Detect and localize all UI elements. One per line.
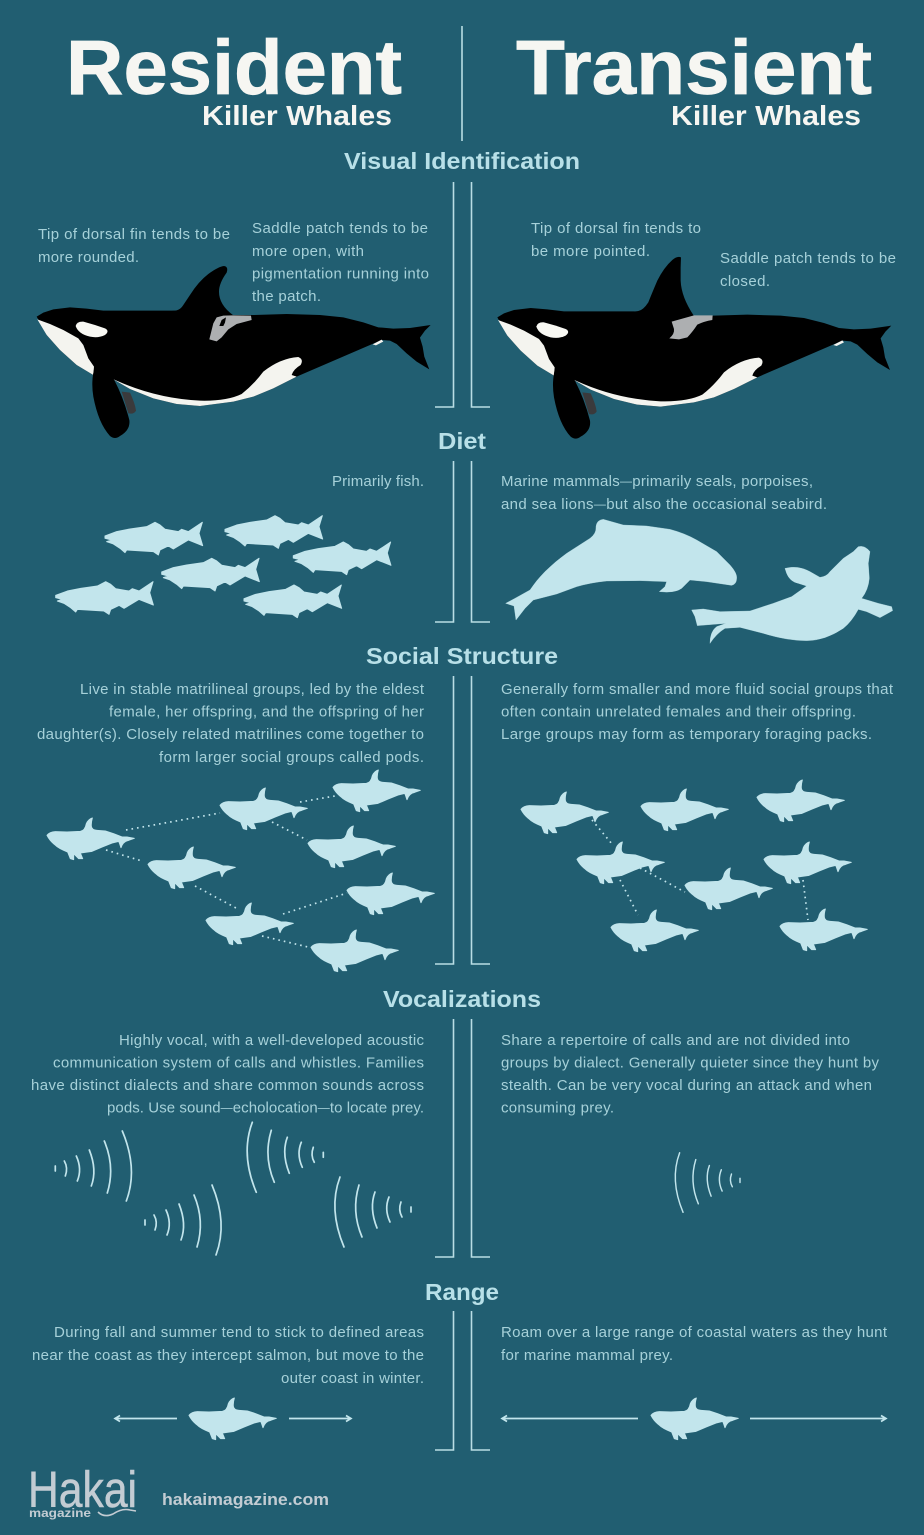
text: transient saddle patch: Saddle patch tends to be — [720, 250, 896, 267]
saddle patch closed — [669, 315, 713, 339]
diagram: transient range — [502, 1398, 886, 1440]
footer: Hakai logo: Hakai — [28, 1461, 137, 1518]
title: Transient: Transient — [516, 25, 872, 111]
footer: website: hakaimagazine.com — [162, 1491, 329, 1509]
subtitle: Killer Whales right: Killer Whales — [671, 100, 861, 131]
text: transient range: for marine mammal prey. — [501, 1347, 673, 1364]
text: transient diet: — — [620, 474, 632, 488]
header divider — [461, 26, 463, 141]
title: Resident: Resident — [66, 25, 402, 111]
text: resident dorsal fin — [38, 226, 230, 266]
arrow: short right — [289, 1416, 351, 1422]
icon: porpoise — [506, 519, 737, 620]
text: transient vocalizations: Share a repertoire of calls and are not divided into — [501, 1032, 850, 1049]
text: transient range: Roam over a large range of coastal waters as they hunt — [501, 1324, 888, 1341]
text: resident range — [32, 1324, 424, 1387]
icon: transient sound wave — [675, 1153, 740, 1212]
text: resident social structure: Live in stable matrilineal groups, led by the eldest — [80, 681, 425, 698]
icon: seal — [692, 546, 893, 643]
text: resident range: near the coast as they intercept salmon, but move to the — [32, 1347, 424, 1364]
heading: Social Structure: Social Structure — [366, 643, 558, 669]
chart: transient group network — [521, 780, 867, 952]
bracket divider — [435, 461, 490, 622]
bracket divider — [435, 182, 490, 407]
text: resident social structure: form larger social groups called pods. — [159, 749, 424, 766]
text: resident vocalizations: pods. Use sound — [107, 1100, 221, 1116]
text: resident dorsal fin: Tip of dorsal fin tends to be — [38, 226, 230, 243]
text: transient diet: — — [594, 497, 606, 511]
text: transient dorsal fin: Tip of dorsal fin tends to — [531, 220, 701, 237]
text: resident vocalizations: Highly vocal, with a well-developed acoustic — [119, 1032, 424, 1049]
section: social structure — [37, 643, 894, 972]
text: transient vocalizations — [501, 1032, 880, 1116]
section: visual identification — [37, 148, 896, 439]
text: resident vocalizations: — — [221, 1101, 233, 1115]
text: transient vocalizations: groups by dialect. Generally quieter since they hunt by — [501, 1054, 880, 1072]
section: vocalizations — [31, 986, 880, 1257]
illustration: resident orca — [37, 266, 431, 438]
subtitle: Killer Whales: Killer Whales — [202, 100, 392, 131]
heading: Range: Range — [425, 1279, 499, 1305]
text: transient saddle patch — [720, 250, 896, 290]
section: range — [32, 1279, 888, 1450]
text: transient saddle patch: closed. — [720, 273, 770, 290]
text: resident range: outer coast in winter. — [281, 1370, 424, 1387]
bracket divider — [435, 1019, 490, 1257]
text: transient vocalizations: stealth. Can be very vocal during an attack and when — [501, 1077, 872, 1094]
text: resident vocalizations: echolocation — [233, 1100, 318, 1116]
section: diet — [56, 428, 893, 643]
text: resident vocalizations: to locate prey. — [330, 1100, 424, 1116]
arrow: long left — [502, 1416, 638, 1422]
text: resident saddle patch: the patch. — [252, 288, 321, 305]
text: resident vocalizations: — — [318, 1101, 330, 1115]
text: transient diet: primarily seals, porpoises, — [632, 473, 813, 490]
text: resident saddle patch: pigmentation running into — [252, 266, 429, 282]
bracket divider — [435, 676, 490, 964]
text: resident saddle patch — [252, 220, 429, 305]
text: resident saddle patch: Saddle patch tends to be — [252, 220, 428, 237]
heading: Visual Identification: Visual Identification — [344, 148, 580, 174]
header: transient — [516, 25, 872, 131]
text: resident diet: Primarily fish. — [332, 473, 424, 490]
text: transient social structure: often contain unrelated females and their offspring. — [501, 704, 856, 720]
text: resident vocalizations: communication system of calls and whistles. Families — [53, 1054, 424, 1072]
text: transient diet: and sea lions — [501, 496, 594, 513]
heading: Vocalizations: Vocalizations — [383, 986, 541, 1012]
icon: orca resident range — [189, 1398, 276, 1440]
text: resident social structure — [37, 681, 425, 766]
arrow: short left — [115, 1416, 177, 1422]
text: resident vocalizations: have distinct dialects and share common sounds across — [31, 1077, 424, 1094]
illustration: transient orca — [497, 257, 891, 439]
text: resident saddle patch: more open, with — [252, 243, 364, 260]
text: transient social structure — [501, 681, 894, 743]
footer: Hakai logo: magazine — [29, 1506, 91, 1520]
text: transient dorsal fin — [531, 220, 701, 260]
pointed dorsal fin — [634, 257, 694, 316]
diagram: resident range — [115, 1398, 351, 1440]
header: resident — [66, 25, 402, 131]
chart: resident pod network — [47, 770, 434, 972]
text: resident range: During fall and summer tend to stick to defined areas — [54, 1324, 424, 1341]
text: resident dorsal fin: more rounded. — [38, 249, 139, 266]
text: transient diet: Marine mammals — [501, 473, 620, 490]
saddle patch open — [209, 315, 252, 341]
text: transient vocalizations: consuming prey. — [501, 1100, 614, 1116]
text: resident social structure: female, her offspring, and the offspring of her — [109, 704, 424, 720]
rounded dorsal fin — [172, 266, 233, 315]
icons: salmon school — [56, 516, 391, 618]
text: transient social structure: Large groups may form as temporary foraging packs. — [501, 726, 872, 743]
bracket divider — [435, 1311, 490, 1450]
text: resident social structure: daughter(s). Closely related matrilines come together to — [37, 726, 424, 743]
text: transient social structure: Generally form smaller and more fluid social groups that — [501, 681, 894, 698]
icons: resident sound waves — [55, 1122, 411, 1255]
text: transient range — [501, 1324, 888, 1364]
text: transient diet — [501, 473, 827, 513]
icon: orca transient range — [651, 1398, 738, 1440]
text: transient dorsal fin: be more pointed. — [531, 243, 650, 260]
heading: Diet: Diet — [438, 428, 486, 454]
arrow: long right — [750, 1416, 886, 1422]
text: resident vocalizations — [31, 1032, 424, 1116]
text: transient diet: but also the occasional seabird. — [606, 496, 827, 513]
